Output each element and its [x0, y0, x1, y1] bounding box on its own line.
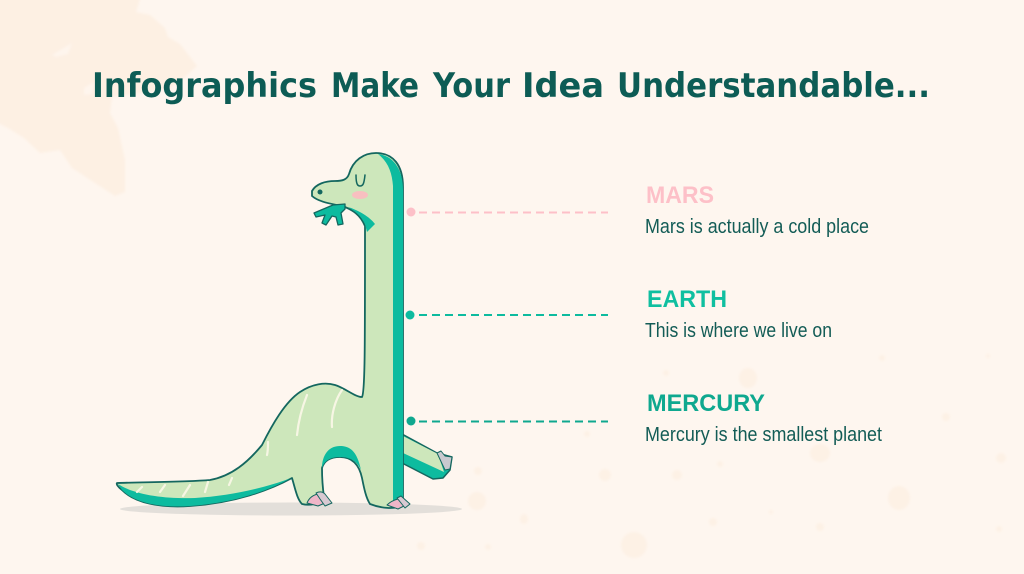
throat shadow — [348, 207, 375, 232]
leaves in mouth — [314, 204, 345, 225]
background dots — [417, 354, 1006, 558]
nostril — [318, 190, 322, 194]
cheek — [352, 191, 368, 199]
title — [92, 66, 930, 106]
belly arch stripe — [322, 446, 361, 470]
label: Mercury: MERCURY — [647, 390, 765, 417]
background leaf blotch — [0, 0, 197, 196]
dinosaur illustration — [117, 153, 452, 509]
front foot claws — [307, 492, 410, 509]
dinosaur face — [318, 175, 368, 199]
title: Understandable... — [617, 66, 930, 106]
label: Earth: This is where we live on — [645, 319, 832, 342]
neck and front stripe — [378, 154, 403, 507]
connector: Earth — [406, 310, 608, 320]
title: Your — [432, 66, 510, 106]
title: Infographics — [92, 66, 317, 106]
dinosaur far leg — [402, 434, 452, 479]
connector: Mars — [406, 208, 608, 216]
back highlights — [137, 390, 342, 496]
label: Mercury — [645, 390, 882, 446]
label: Mars: MARS — [646, 182, 714, 209]
label: Mars: Mars is actually a cold place — [645, 215, 869, 238]
label: Mars — [645, 182, 869, 238]
title: Make — [331, 66, 419, 106]
label: Earth: EARTH — [647, 286, 727, 313]
tail underside stripe — [118, 478, 291, 506]
label: Earth — [645, 286, 832, 342]
ground shadow — [120, 502, 462, 516]
label: Mercury: Mercury is the smallest planet — [645, 423, 882, 446]
eye — [356, 175, 365, 186]
dinosaur body — [117, 153, 403, 508]
title: Idea — [522, 66, 604, 106]
connector: Mercury — [406, 416, 608, 426]
